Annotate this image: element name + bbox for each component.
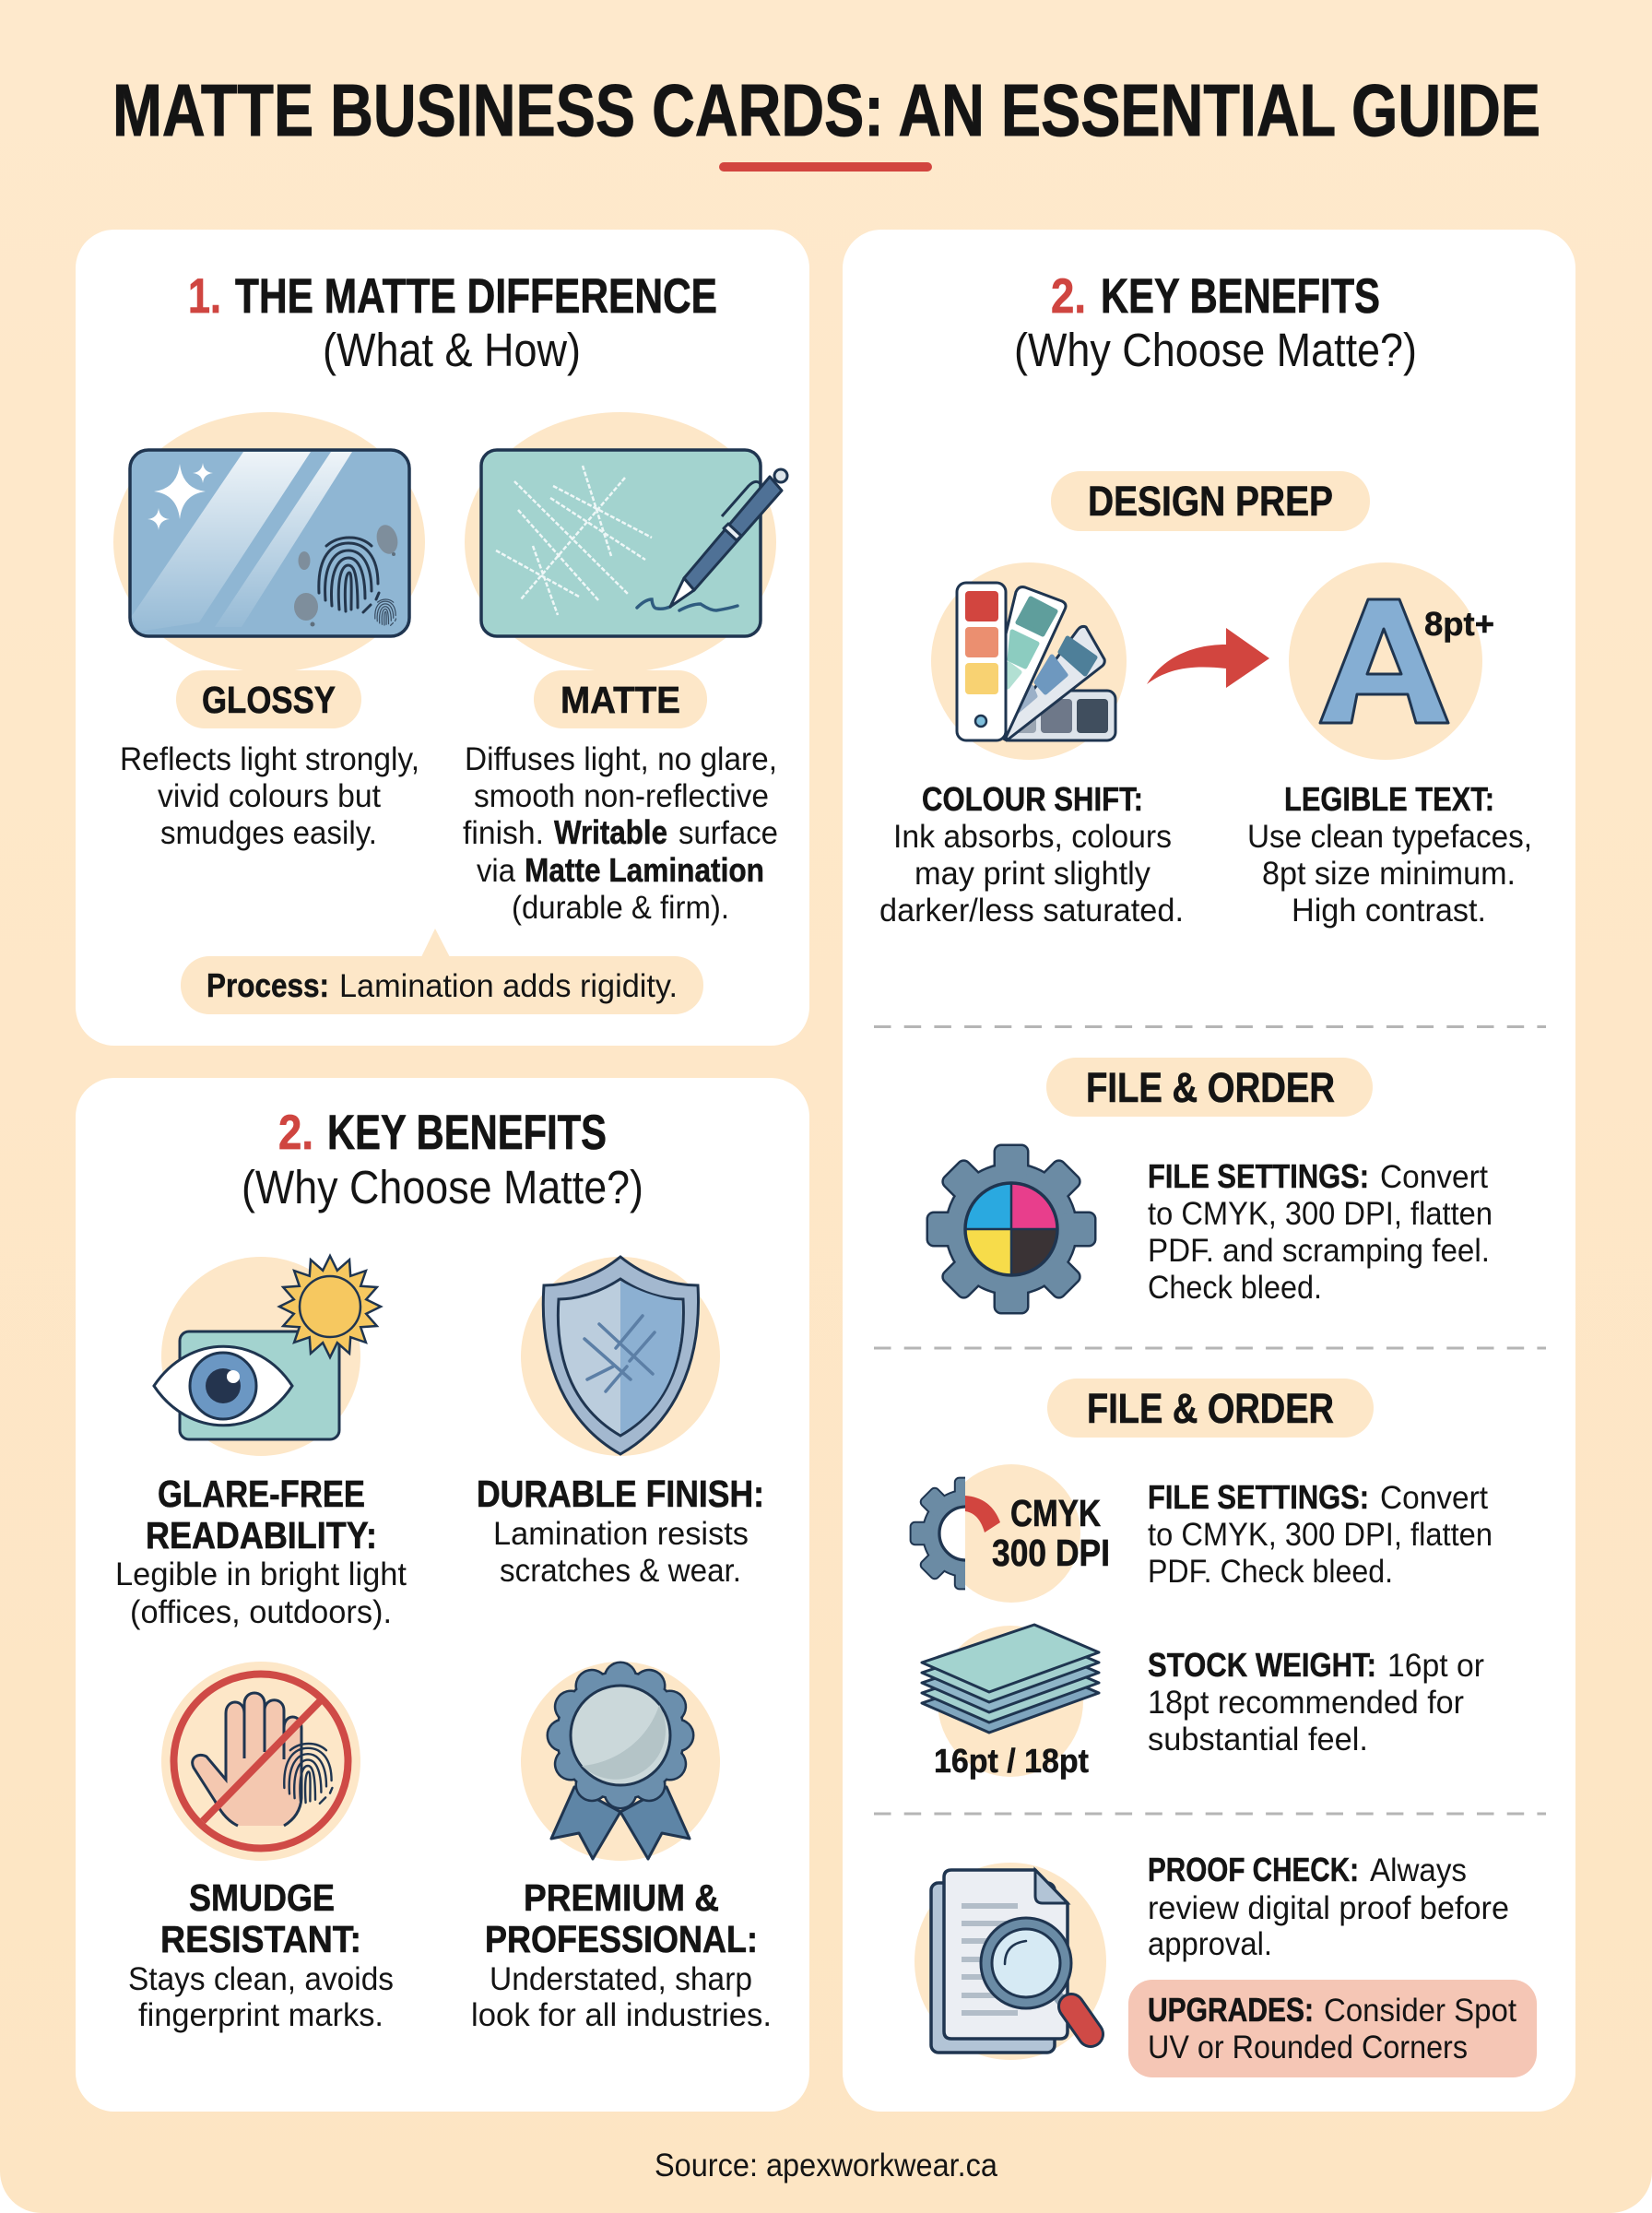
icon: half gear CMYK 300 DPI: CMYK: [1010, 1492, 1101, 1534]
text: durable finish: Lamination resists: [493, 1515, 749, 1552]
text: legible text: Use clean typefaces,: [1247, 818, 1532, 855]
text: legible text: [1247, 780, 1532, 929]
heading: key benefits: 2.: [278, 1106, 313, 1160]
icon: card stock layers: 16pt / 18pt: [934, 1742, 1089, 1780]
label: design prep: [1051, 471, 1370, 531]
text: file settings two: [1148, 1478, 1493, 1590]
text: matte description: via: [477, 852, 515, 889]
icon: letter A 8pt+: [1289, 562, 1494, 760]
text: glossy description: [120, 740, 419, 851]
icon: no smudge hand: [161, 1662, 360, 1861]
icon: half gear CMYK 300 DPI: [912, 1464, 1110, 1603]
text: matte description: finish.: [463, 814, 544, 851]
text: proof check: approval.: [1148, 1925, 1272, 1962]
text: smudge resistant: fingerprint marks.: [138, 1996, 384, 2033]
text: stock weight: 18pt recommended for: [1148, 1684, 1464, 1721]
text: legible text: High contrast.: [1292, 892, 1486, 929]
heading: the matte difference: [188, 269, 717, 376]
text: smudge resistant: [128, 1876, 394, 2033]
text: file settings one: FILE SETTINGS:: [1148, 1157, 1369, 1195]
icon: CMYK gear: [928, 1146, 1094, 1312]
text: matte description: Diffuses light, no glare,: [465, 740, 777, 777]
text: colour shift: [879, 780, 1184, 929]
text: glare-free readability: Legible in bright light: [115, 1556, 407, 1592]
label: matte: MATTE: [560, 679, 680, 721]
text: matte description: [463, 740, 778, 926]
text: legible text: LEGIBLE TEXT:: [1284, 780, 1494, 818]
text: smudge resistant: RESISTANT:: [160, 1918, 361, 1960]
callout: upgrades: UV or Rounded Corners: [1148, 2029, 1468, 2065]
text: file settings one: Convert: [1380, 1158, 1488, 1195]
text: matte description: smooth non-reflective: [474, 777, 769, 814]
text: file settings one: Check bleed.: [1148, 1269, 1322, 1306]
label: design prep: DESIGN PREP: [1088, 478, 1333, 525]
text: stock weight: substantial feel.: [1148, 1721, 1368, 1757]
text: durable finish: DURABLE FINISH:: [477, 1473, 764, 1515]
text: file settings two: Convert: [1380, 1479, 1488, 1516]
text: matte description: surface: [678, 814, 778, 851]
text: durable finish: scratches & wear.: [500, 1552, 741, 1589]
icon: colour swatch fan: [931, 562, 1127, 760]
heading: key benefits right: 2.: [1051, 269, 1086, 324]
text: legible text: 8pt size minimum.: [1262, 855, 1516, 892]
text: colour shift: COLOUR SHIFT:: [922, 780, 1143, 818]
heading: key benefits right: KEY BENEFITS: [1101, 269, 1380, 324]
label: file and order one: [1046, 1058, 1373, 1117]
text: colour shift: Ink absorbs, colours: [893, 818, 1172, 855]
text: proof check: review digital proof before: [1148, 1889, 1509, 1926]
text: glare-free readability: [115, 1473, 407, 1630]
label: glossy: [176, 670, 361, 728]
text: premium and professional: PROFESSIONAL:: [485, 1918, 758, 1960]
heading: the matte difference: (What & How): [323, 324, 581, 376]
text: glare-free readability: (offices, outdoors).: [130, 1593, 392, 1630]
panel: key benefits right: [843, 230, 1575, 2112]
text: smudge resistant: SMUDGE: [189, 1876, 335, 1919]
text: file settings one: to CMYK, 300 DPI, flatten: [1148, 1195, 1493, 1232]
icon: letter A 8pt+: 8pt+: [1424, 605, 1494, 643]
icon: card stock layers: [922, 1625, 1099, 1780]
label: file and order two: FILE & ORDER: [1087, 1385, 1334, 1432]
pen: [670, 469, 787, 607]
text: smudge resistant: Stays clean, avoids: [128, 1960, 394, 1997]
text: glossy description: vivid colours but: [158, 777, 381, 814]
text: glare-free readability: GLARE-FREE: [158, 1473, 365, 1515]
callout: process: Lamination adds rigidity.: [339, 967, 678, 1004]
text: file settings two: FILE SETTINGS:: [1148, 1478, 1369, 1516]
icon: document and magnifier: [914, 1863, 1106, 2060]
callout: process: [181, 929, 703, 1014]
text: stock weight: STOCK WEIGHT:: [1148, 1646, 1376, 1684]
text: file settings two: to CMYK, 300 DPI, flatten: [1148, 1516, 1493, 1553]
text: glare-free readability: READABILITY:: [146, 1514, 377, 1556]
callout: upgrades: Consider Spot: [1324, 1992, 1516, 2029]
heading: key benefits right: [1014, 269, 1417, 376]
heading: key benefits: (Why Choose Matte?): [242, 1161, 643, 1213]
icon: half gear CMYK 300 DPI: 300 DPI: [992, 1532, 1110, 1574]
text: premium and professional: PREMIUM &: [524, 1876, 719, 1919]
heading: key benefits: [242, 1106, 643, 1213]
text: proof check: PROOF CHECK:: [1148, 1851, 1359, 1888]
panel: key benefits left: [76, 1078, 809, 2112]
source line: Source: apexworkwear.ca: [655, 2147, 997, 2183]
text: file settings one: PDF. and scramping feel.: [1148, 1232, 1490, 1269]
icon: matte card with pen: [465, 412, 787, 672]
text: proof check: Always: [1370, 1852, 1467, 1888]
label: glossy: GLOSSY: [202, 679, 336, 721]
text: stock weight: 16pt or: [1387, 1647, 1484, 1684]
text: matte description: Writable: [554, 813, 667, 851]
text: colour shift: may print slightly: [914, 855, 1150, 892]
label: file and order two: [1047, 1379, 1374, 1438]
text: matte description: (durable & firm).: [512, 889, 729, 926]
text: colour shift: darker/less saturated.: [879, 892, 1184, 929]
heading: key benefits right: (Why Choose Matte?): [1014, 324, 1417, 376]
callout: process: Process:: [206, 966, 329, 1004]
heading: the matte difference: THE MATTE DIFFERENCE: [235, 269, 717, 324]
icon: award rosette: [521, 1662, 720, 1861]
text: proof check: [1148, 1851, 1509, 1962]
icon: shield: [521, 1257, 720, 1456]
text: file settings one: [1148, 1157, 1493, 1306]
icon: glossy card: [113, 412, 425, 672]
label: matte: [534, 670, 707, 728]
text: glossy description: smudges easily.: [160, 814, 377, 851]
text: premium and professional: Understated, sharp: [490, 1960, 752, 1997]
text: file settings two: PDF. Check bleed.: [1148, 1553, 1393, 1590]
heading: the matte difference: 1.: [188, 269, 221, 324]
icon: eye, card and sun: [154, 1256, 381, 1456]
callout: upgrades: [1128, 1980, 1537, 2077]
panel: the matte difference: [76, 230, 809, 1046]
text: matte description: Matte Lamination: [525, 851, 764, 889]
text: premium and professional: look for all industries.: [471, 1996, 772, 2033]
arrow: curved red arrow: [1147, 628, 1269, 688]
label: file and order one: FILE & ORDER: [1086, 1064, 1335, 1111]
heading: key benefits: KEY BENEFITS: [327, 1106, 607, 1160]
text: durable finish: [477, 1473, 764, 1589]
text: premium and professional: [471, 1876, 772, 2033]
text: glossy description: Reflects light strongly,: [120, 740, 419, 777]
callout: upgrades: UPGRADES:: [1148, 1991, 1314, 2029]
text: stock weight: [1148, 1646, 1484, 1757]
